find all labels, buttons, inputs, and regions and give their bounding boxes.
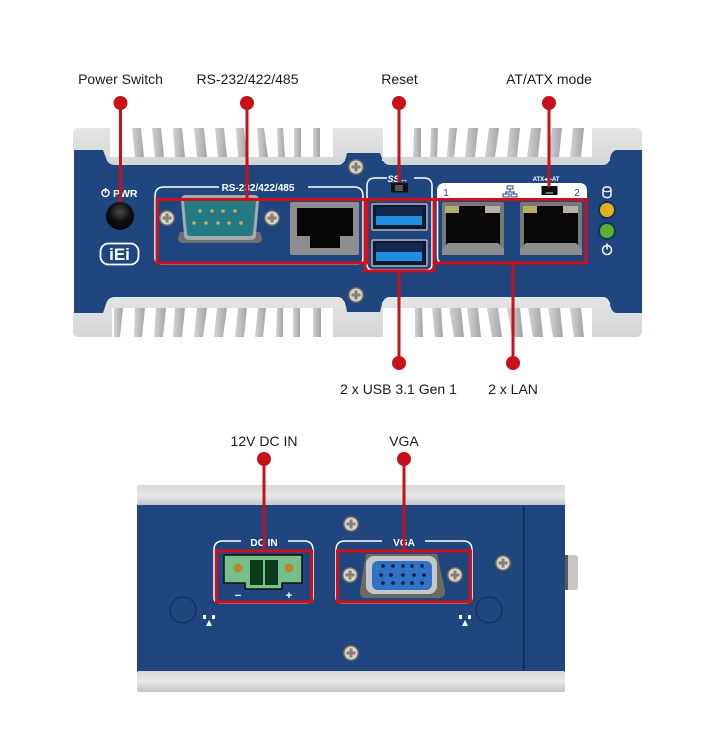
green power terminal [224,555,302,589]
highlight boxes: rear panel [216,551,470,602]
polarity marks: + [286,590,292,602]
callout: Reset [381,71,418,183]
rear device panel [137,485,578,692]
chassis screws [348,159,364,303]
top heatsink fins [132,128,584,157]
power label [102,188,138,200]
SuperSpeed logo: SS↔ [387,174,409,184]
callout: Power Switch: Power Switch [78,71,163,87]
AT/ATX label: ATX◂ ▸AT [533,177,560,183]
panel screws [343,516,511,661]
reset switch [391,183,408,192]
blue chassis [74,149,642,314]
silver bottom rail [137,671,565,692]
antenna cutouts [170,597,502,623]
RJ45 serial port [290,202,359,255]
status LEDs [598,187,616,254]
callout: LAN [488,264,538,397]
side thumbscrew [565,555,578,590]
DC IN label: DC IN [250,538,278,549]
AT/ATX switch [542,186,558,195]
IEI logo [100,244,138,264]
callout: RS-232/422/485: RS-232/422/485 [197,71,299,87]
DC IN outline [214,541,313,603]
VGA outline [336,541,472,603]
DB9 serial connector [159,195,280,243]
VGA connector [342,554,463,598]
callout: AT/ATX mode: AT/ATX mode [506,71,592,87]
power label: PWR [113,188,138,200]
bottom heatsink fins [114,308,584,337]
callout: AT/ATX mode [506,71,592,187]
LAN group outline [437,183,587,263]
antenna icons [203,615,471,626]
front device panel [73,128,642,337]
callout: Power Switch [78,71,163,202]
polarity marks [235,590,292,602]
side seam [523,506,524,671]
serial and RJ45 group outline [155,187,363,264]
power button [106,202,134,230]
USB 3.1 ports [371,203,428,267]
blue chassis [137,505,565,672]
callout: 12V DC IN [231,433,297,550]
USB group outline [367,178,432,270]
highlight boxes: front panel [157,200,586,271]
callout: USB: 2 x USB 3.1 Gen 1 [340,381,457,397]
silver bottom rail [73,297,642,337]
silver top rail [137,485,565,506]
callout: 12V DC IN: 12V DC IN [231,433,297,449]
callout: Reset: Reset [381,71,418,87]
RS-232/422/485 label: RS-232/422/485 [222,183,295,194]
callout: VGA: VGA [389,433,419,449]
IEI logo: iEi [109,245,130,264]
silver top rail [73,128,642,165]
LAN port numbers and icon: 1 [443,188,449,199]
callout: USB [340,272,457,397]
callout: VGA [389,433,419,550]
LAN port numbers and icon: 2 [574,188,580,199]
VGA label: VGA [393,538,415,549]
callout: RS-232/422/485 [197,71,299,198]
polarity marks: − [235,590,241,602]
LAN port numbers and icon [443,186,580,199]
LAN ports [442,202,582,255]
callout: LAN: 2 x LAN [488,381,538,397]
